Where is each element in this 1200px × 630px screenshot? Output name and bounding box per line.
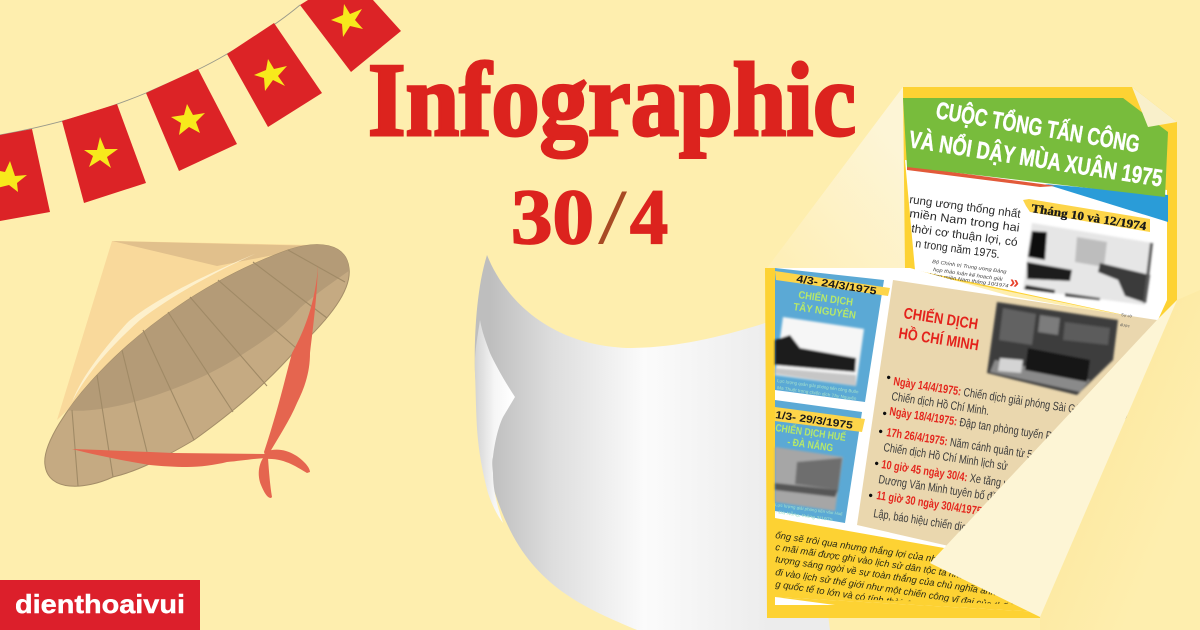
conclusion text <box>775 532 1012 604</box>
title line: 30/4: / <box>598 173 627 260</box>
timeline list: • <box>874 456 880 471</box>
small side note <box>1120 312 1133 328</box>
timeline list <box>869 376 1128 532</box>
red corner strip <box>1105 98 1132 106</box>
photo caption: Bộ Chính trị Trung ương Đảng <box>932 258 1007 275</box>
panel heading: HỒ CHÍ MINH <box>897 324 980 354</box>
card background <box>775 400 862 523</box>
body text: rung ương thống nhất <box>909 194 1022 221</box>
title line: Infographic: Infographic <box>368 41 856 158</box>
body text: n trong năm 1975. <box>915 238 1000 261</box>
date ribbon <box>775 271 890 296</box>
timeline list: Chiến dịch Hồ Chí Minh lịch sử <box>882 441 1009 474</box>
timeline list: 10 giờ 45 ngày 30/4: Xe tăng và bộ binh <box>880 458 1046 497</box>
photo caption: phóng miền Nam tháng 10/1974 <box>925 272 1009 290</box>
bottom yellow band <box>775 518 1040 612</box>
date ribbon <box>1023 199 1150 232</box>
timeline list: Ngày 14/4/1975: Chiến dịch giải phóng Sài Gòn – Gia Định <box>892 375 1131 425</box>
card heading <box>775 421 847 454</box>
curled grey paper <box>475 255 830 630</box>
card heading: TÂY NGUYÊN <box>793 300 857 322</box>
card heading: CHIẾN DỊCH HUẾ <box>775 421 847 444</box>
corner fold <box>1132 87 1177 127</box>
date text: Tháng 10 và 12/1974 <box>1031 201 1147 233</box>
logo background <box>0 580 200 630</box>
card caption: Ma Thuột trong chiến dịch Tây Nguyên <box>777 385 857 401</box>
logo: dienthoaivui <box>0 580 200 630</box>
title <box>368 41 856 260</box>
photo caption <box>925 258 1009 290</box>
timeline list: 11 giờ 30 ngày 30/4/1975: Lá cờ <box>875 489 1011 523</box>
hat highlight <box>72 253 257 402</box>
card caption <box>775 502 844 522</box>
date: 1/3- 29/3/1975 <box>775 409 854 432</box>
green banner <box>903 98 1168 197</box>
card heading: - ĐÀ NẴNG <box>787 435 834 454</box>
small side note: Sự cờ <box>1121 312 1133 319</box>
white corner <box>775 597 835 605</box>
body text: thời cơ thuận lợi, có <box>911 223 1018 249</box>
timeline list: Chiến dịch Hồ Chí Minh. <box>890 390 990 418</box>
card: Huế Đà Nẵng <box>775 400 865 523</box>
conclusion text: ống sẽ trôi qua nhưng thắng lợi của nhân dân ta <box>775 530 976 571</box>
panel background <box>857 280 1157 560</box>
conclusion text: tượng sáng ngời về sự toàn thắng của chủ nghĩa anh hùng <box>775 554 1021 602</box>
conclusion text: đi vào lịch sử thế giới như một chiến công vĩ đại của thế kỉ <box>775 567 1018 615</box>
body text: miền Nam trong hai <box>909 208 1020 235</box>
panel heading <box>897 305 980 354</box>
heading text <box>907 96 1164 193</box>
panel heading: CHIẾN DỊCH <box>902 305 979 333</box>
date ribbon <box>775 407 865 432</box>
timeline list: • <box>886 370 892 385</box>
tank photo <box>775 317 864 386</box>
logo text: dienthoaivui <box>15 589 185 619</box>
folded light panel behind poster <box>767 87 915 268</box>
tank street photo <box>987 302 1118 395</box>
timeline list: Dương Văn Minh tuyên bố đầu hàng <box>877 473 1026 509</box>
body text <box>909 194 1022 261</box>
lower yellow frame <box>765 268 1040 618</box>
timeline list: • <box>882 406 888 421</box>
page flap <box>930 300 1177 617</box>
timeline list: Ngày 18/4/1975: Đập tan phòng tuyến Phan Rang <box>888 405 1092 449</box>
icon: conical hat <box>45 230 360 498</box>
poster top yellow frame <box>903 87 1177 322</box>
card caption: Lực lượng quân giải phóng tiến công Buôn <box>777 378 859 394</box>
poster image <box>765 87 1200 630</box>
curl body <box>475 255 830 630</box>
hat ribbon <box>72 265 318 498</box>
chevrons: » <box>1008 272 1020 292</box>
panel: Hồ Chí Minh campaign <box>775 280 1157 617</box>
title line: 30/4: 4 <box>630 173 668 260</box>
card caption: Lực lượng giải phóng tiến vào Huế <box>775 502 844 517</box>
card heading <box>793 288 857 322</box>
card heading: CHIẾN DỊCH <box>798 288 854 309</box>
hat cone shaded side <box>112 241 320 266</box>
title line: 30/4: 30 <box>511 173 594 260</box>
card background <box>775 268 884 402</box>
curl folded strip <box>475 320 515 523</box>
small side note: được <box>1120 322 1130 328</box>
poster top sheet <box>903 87 1177 322</box>
card caption: - Đà Nẵng, tháng 3/1975 <box>775 509 834 522</box>
poster top white page <box>905 160 1167 322</box>
timeline list: Lập, báo hiệu chiến dịch Hồ Chí Minh <box>872 507 1025 544</box>
lower white page <box>775 268 1083 612</box>
date: 4/3- 24/3/1975 <box>796 273 878 298</box>
card: Tây Nguyên <box>775 268 890 402</box>
photo caption: họp thảo luận kế hoạch giải <box>933 266 1004 283</box>
flag bunting <box>0 0 401 221</box>
hat cone <box>57 241 313 420</box>
blue band <box>1045 184 1168 222</box>
citadel photo <box>775 447 843 511</box>
red lower strip <box>907 166 1056 187</box>
hat brim inner shade <box>68 244 349 411</box>
meeting photo <box>1023 223 1153 305</box>
poster lower sheet <box>765 262 1157 618</box>
hat ribs <box>72 250 345 486</box>
timeline list: • <box>878 424 884 439</box>
page flap shadow <box>1040 290 1200 630</box>
conclusion text: c mãi mãi được ghi vào lịch sử dân tộc ta như một <box>775 542 985 585</box>
timeline list: • <box>868 488 874 503</box>
hat brim <box>45 245 349 486</box>
timeline list: 17h 26/4/1975: Năm cánh quân từ 5 hướng tiến vào <box>885 426 1097 472</box>
conclusion text: g quốc tế to lớn và có tính thời đại sâu sắc <box>775 579 953 617</box>
